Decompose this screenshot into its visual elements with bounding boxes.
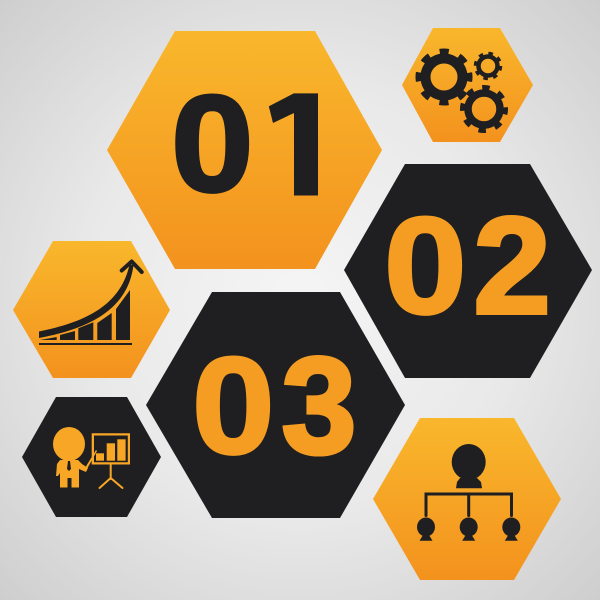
panel: hexagon 01 [107,31,382,269]
number 01 [175,93,318,196]
icon: presenter [53,427,130,488]
panel: gears hexagon [402,28,533,142]
number 01: 0 [171,67,254,221]
panel: presenter hexagon [22,397,161,517]
panel: hexagon 03 [146,292,405,518]
number 01: 1 [251,63,351,225]
icon: gears [418,52,506,130]
panel: hexagon 02 [344,164,592,378]
number 03 [192,329,356,483]
icon: growth chart [39,262,142,345]
panel: organisation hexagon [373,418,561,580]
number 03: 3 [282,329,356,482]
number 02 [384,189,551,343]
number 03: 0 [192,329,275,483]
panel: growth chart hexagon [13,241,170,378]
icon: organisation tree [417,444,520,541]
number 02: 2 [474,190,551,343]
number 02: 0 [384,189,467,343]
